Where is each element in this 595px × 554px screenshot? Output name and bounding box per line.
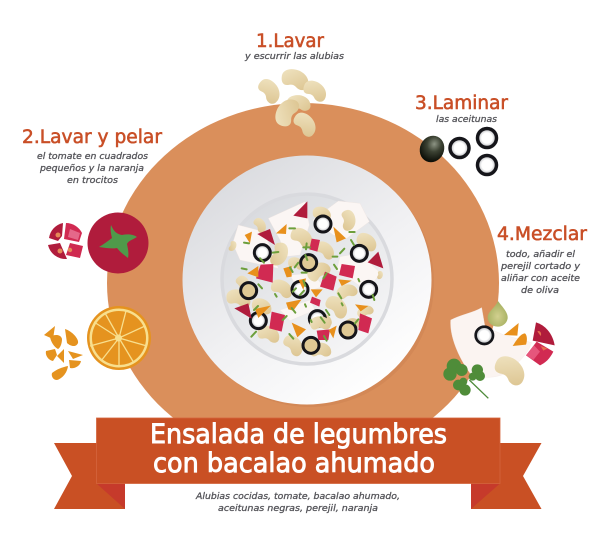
background circle [107, 103, 499, 463]
banner [54, 418, 542, 509]
text: step 4: de oliva [521, 286, 559, 296]
ribbon main [96, 418, 500, 484]
text: step 2: en trocitos [67, 176, 118, 186]
text: step 3: las aceitunas [436, 115, 497, 125]
ribbon left fold [96, 484, 125, 509]
text: step 2 [37, 152, 148, 186]
bean [490, 352, 530, 388]
icon: whole olive [415, 132, 449, 166]
parsley [443, 359, 488, 398]
orange pieces [504, 323, 527, 346]
text: step 4: perejil cortado y [500, 262, 581, 272]
icon: whole tomato [88, 212, 148, 274]
plate [182, 156, 434, 407]
icon: orange pieces [44, 326, 83, 380]
illustration: mixed ingredients [443, 301, 555, 398]
text: step 4: todo, añadir el [506, 250, 576, 260]
ribbon right fold [471, 484, 500, 509]
icon: chopped tomato [48, 223, 83, 259]
olive slice [476, 327, 493, 344]
ingredients text: Alubias cocidas, tomate, bacalao ahumado, [195, 492, 400, 502]
heading: step 2: 2.Lavar y pelar [22, 127, 162, 148]
salad [225, 201, 383, 359]
heading: step 4: 4.Mezclar [497, 224, 587, 245]
ingredients text [195, 492, 400, 514]
tomato pieces [526, 322, 555, 365]
title line 1: Ensalada de legumbres [150, 419, 447, 450]
heading: step 1: 1.Lavar [256, 31, 324, 52]
text: step 4: aliñar con aceite [501, 274, 580, 284]
ribbon left tail [54, 443, 125, 509]
cod fillet [451, 308, 532, 377]
text: step 1: y escurrir las alubias [244, 52, 344, 62]
text: step 4 [500, 250, 581, 296]
text: step 2: el tomate en cuadrados [37, 152, 148, 162]
heading: step 3: 3.Laminar [415, 93, 508, 114]
icon: olive slices [450, 128, 496, 174]
text: step 2: pequeños y la naranja [39, 164, 144, 174]
icon: orange slice [87, 306, 151, 370]
ingredients text: aceitunas negras, perejil, naranja [218, 504, 378, 514]
icon: beans [254, 67, 330, 139]
olive oil drop [488, 301, 508, 327]
title line 2: con bacalao ahumado [153, 448, 435, 479]
ribbon right tail [471, 443, 542, 509]
